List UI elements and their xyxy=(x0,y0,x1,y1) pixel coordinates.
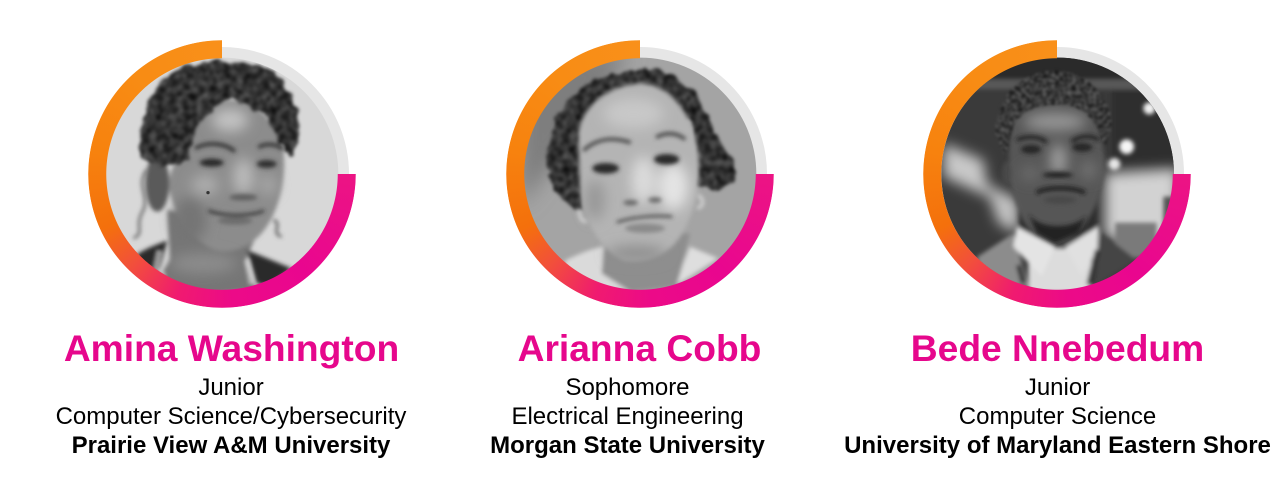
name: Bede Nnebedum xyxy=(911,327,1204,369)
portrait: Arianna Cobb xyxy=(524,47,767,290)
details: Prairie View A&M University xyxy=(72,432,390,459)
name: Amina Washington xyxy=(64,327,399,369)
details: Computer Science/Cybersecurity xyxy=(56,403,406,430)
curly hair xyxy=(546,69,736,212)
portrait: Amina Washington xyxy=(106,47,349,290)
details: Junior xyxy=(198,374,264,401)
progress ring: orange to pink arc xyxy=(923,40,1191,308)
progress ring: orange to pink arc xyxy=(88,40,356,308)
details: University of Maryland Eastern Shore xyxy=(844,432,1271,459)
details: Computer Science xyxy=(959,403,1156,430)
panel: Arianna Cobb xyxy=(490,40,774,459)
portrait: Bede Nnebedum xyxy=(941,47,1184,290)
curly hair xyxy=(141,61,299,165)
short hair xyxy=(996,71,1112,154)
details: Junior xyxy=(1025,374,1090,401)
details: Electrical Engineering xyxy=(511,403,744,430)
details: Morgan State University xyxy=(490,432,765,459)
details xyxy=(844,374,1271,459)
panel: Bede Nnebedum xyxy=(844,40,1271,459)
details: Sophomore xyxy=(565,374,690,401)
details xyxy=(56,374,406,459)
name: Arianna Cobb xyxy=(518,327,761,369)
progress ring: orange to pink arc xyxy=(506,40,774,308)
details xyxy=(490,374,765,459)
panel: Amina Washington xyxy=(56,40,406,459)
